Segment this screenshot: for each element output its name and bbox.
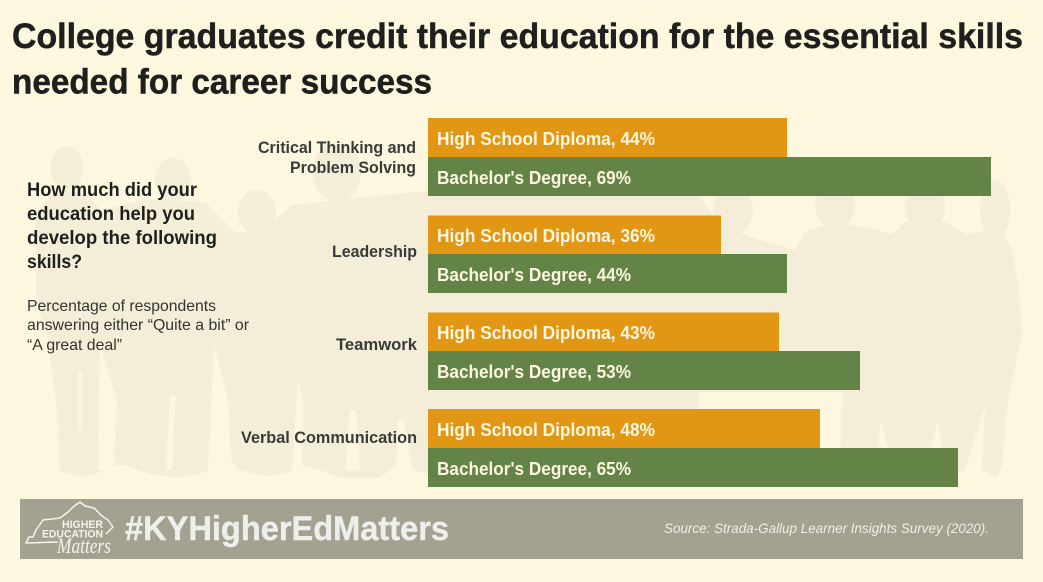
bars: teamwork <box>428 312 860 390</box>
title: College graduates credit their education for the essential skills <box>12 17 1023 56</box>
bars: verbal communication <box>428 409 958 487</box>
title: needed for career success <box>12 62 432 102</box>
background silhouettes of people <box>36 142 1022 478</box>
skill labels: Teamwork <box>336 335 418 354</box>
bars: teamwork: High School Diploma, 43% <box>437 322 655 343</box>
subtext: percentage note <box>27 298 250 354</box>
skill labels: Critical Thinking and <box>258 138 416 157</box>
skill labels: Problem Solving <box>290 158 416 177</box>
skill labels <box>241 138 418 447</box>
bars: leadership: Bachelor's Degree, 44% <box>437 264 631 285</box>
question text: How much did your <box>27 179 197 201</box>
bars: leadership: High School Diploma, 36% <box>437 225 655 246</box>
icon: Kentucky outline logo <box>26 502 113 558</box>
bars: teamwork: Bachelor's Degree, 53% <box>437 361 631 382</box>
bar chart <box>428 118 991 487</box>
title <box>12 17 1023 102</box>
icon: Kentucky outline logo: HIGHER <box>62 519 103 531</box>
question text: skills? <box>27 251 82 273</box>
bars: leadership <box>428 216 787 293</box>
bars: critical thinking: Bachelor's Degree, 69% <box>437 167 631 188</box>
subtext: percentage note: Percentage of respondents <box>27 298 216 315</box>
bars: critical thinking <box>428 118 991 196</box>
question text: develop the following <box>27 227 217 249</box>
subtext: percentage note: answering either “Quite a bit” or <box>27 317 250 334</box>
source note: Source: Strada-Gallup Learner Insights Survey (2020). <box>664 520 989 536</box>
question text <box>27 179 217 273</box>
skill labels: Verbal Communication <box>241 428 417 447</box>
footer banner <box>20 499 1023 559</box>
icon: Kentucky outline logo: Matters <box>56 533 111 558</box>
bars: critical thinking: High School Diploma, 44% <box>437 128 655 149</box>
bars: verbal communication: High School Diploma, 48% <box>437 419 655 440</box>
bars: verbal communication: Bachelor's Degree, 65% <box>437 458 631 479</box>
hashtag: #KYHigherEdMatters <box>125 510 449 548</box>
subtext: percentage note: “A great deal” <box>27 337 122 354</box>
question text: education help you <box>27 203 195 225</box>
icon: Kentucky outline logo: EDUCATION <box>42 528 103 540</box>
skill labels: Leadership <box>332 242 417 261</box>
